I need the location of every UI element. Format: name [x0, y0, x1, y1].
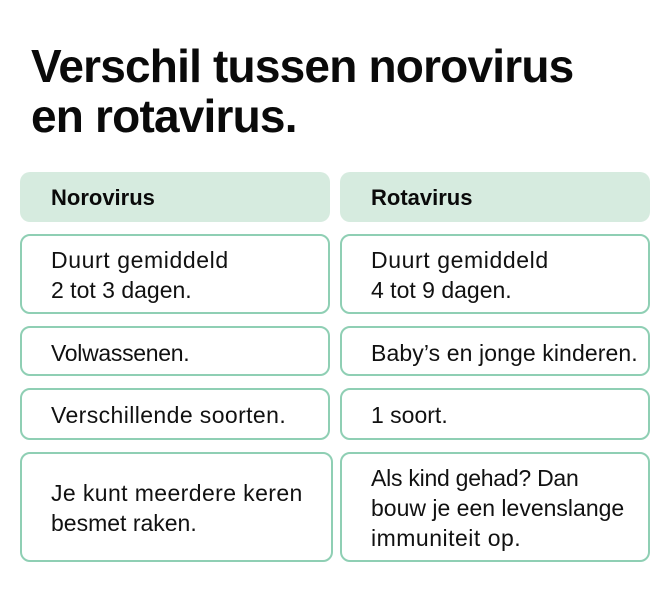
title: Verschil tussen norovirus [31, 40, 573, 92]
cell: norovirus duration: 2 tot 3 dagen. [51, 277, 192, 303]
cell: rotavirus age group [340, 326, 650, 376]
cell: norovirus age group: Volwassenen. [51, 340, 189, 366]
cell: rotavirus immunity: Als kind gehad? Dan [371, 465, 579, 491]
cell: norovirus immunity [20, 452, 333, 562]
cell: rotavirus duration: 4 tot 9 dagen. [371, 277, 512, 303]
cell: rotavirus duration: Duurt gemiddeld [371, 247, 549, 273]
cell: norovirus types: Verschillende soorten. [51, 402, 286, 428]
header: Norovirus [20, 172, 330, 222]
cell: rotavirus types [340, 388, 650, 440]
title: en rotavirus. [31, 90, 297, 142]
cell: norovirus duration: Duurt gemiddeld [51, 247, 229, 273]
header: Rotavirus [340, 172, 650, 222]
cell: norovirus immunity: Je kunt meerdere keren [51, 480, 303, 506]
cell: rotavirus duration [340, 234, 650, 314]
cell: rotavirus immunity: bouw je een levenslange [371, 495, 624, 521]
cell: norovirus types [20, 388, 330, 440]
cell: norovirus duration [20, 234, 330, 314]
header: Norovirus: Norovirus [51, 185, 155, 210]
cell: norovirus immunity: besmet raken. [51, 510, 197, 536]
cell: rotavirus types: 1 soort. [371, 402, 448, 428]
cell: rotavirus age group: Baby’s en jonge kinderen. [371, 340, 638, 366]
cell: rotavirus immunity: immuniteit op. [371, 525, 521, 551]
cell: norovirus age group [20, 326, 330, 376]
header: Rotavirus: Rotavirus [371, 185, 472, 210]
title [31, 40, 573, 142]
cell: rotavirus immunity [340, 452, 650, 562]
